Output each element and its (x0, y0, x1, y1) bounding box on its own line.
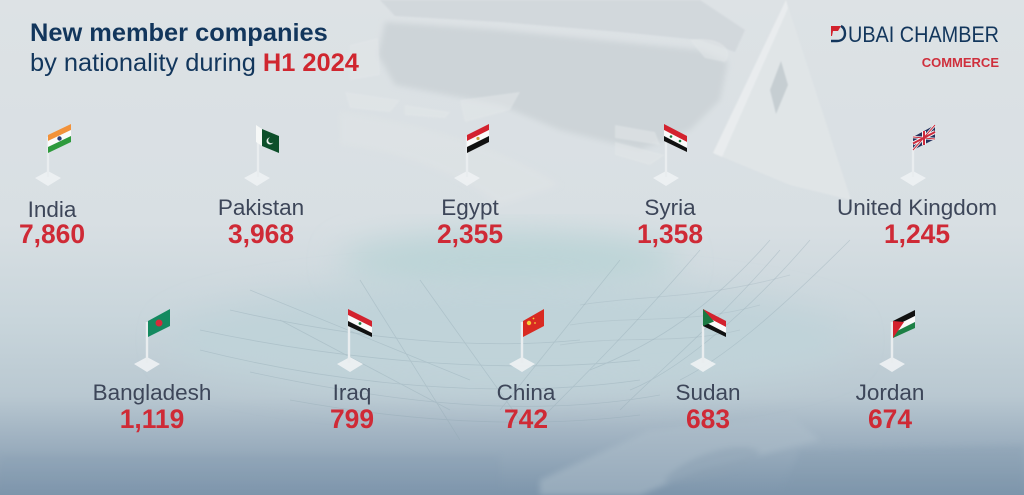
value: Egypt: 2,355 (437, 219, 503, 249)
label: Bangladesh: Bangladesh (93, 380, 211, 405)
icon: Pakistan flag (244, 125, 279, 186)
icon: Iraq flag (337, 309, 372, 372)
icon: India flag (35, 124, 71, 186)
icon: China flag (509, 309, 544, 372)
title: by nationality during (30, 49, 263, 77)
title: H1 2024 (263, 49, 359, 77)
label: Iraq: Iraq (333, 380, 371, 405)
value: Pakistan: 3,968 (228, 219, 294, 249)
title: New member companies (30, 19, 328, 47)
value: Jordan: 674 (868, 404, 912, 434)
icon: Sudan flag (690, 309, 726, 372)
Iraq: flag and figures (330, 309, 374, 434)
icon: Egypt flag (454, 124, 489, 186)
icon: United Kingdom flag (900, 125, 935, 186)
value: Iraq: 799 (330, 404, 374, 434)
tower (713, 0, 851, 200)
China: flag and figures (497, 309, 556, 434)
logo: Dubai Chamber Commerce (831, 22, 999, 70)
decorative lattice (200, 240, 850, 440)
label: Jordan: Jordan (856, 380, 924, 405)
value: Bangladesh: 1,119 (120, 404, 184, 434)
label: China: China (497, 380, 556, 405)
Syria: flag and figures (637, 124, 703, 249)
icon: Jordan flag (879, 310, 915, 372)
logo: Dubai Chamber Commerce: COMMERCE (922, 55, 999, 70)
Sudan: flag and figures (675, 309, 741, 434)
Pakistan: flag and figures (218, 125, 304, 249)
United Kingdom: flag and figures (837, 125, 997, 249)
label: Pakistan: Pakistan (218, 195, 304, 220)
logo: Dubai Chamber Commerce: UBAI CHAMBER (848, 22, 999, 47)
Jordan: flag and figures (856, 310, 924, 434)
value: India: 7,860 (19, 219, 85, 249)
value: China: 742 (504, 404, 548, 434)
lower structure (0, 415, 1024, 495)
value: United Kingdom: 1,245 (884, 219, 950, 249)
label: India: India (28, 197, 77, 222)
label: Syria: Syria (644, 195, 696, 220)
icon: Bangladesh flag (134, 309, 170, 372)
Egypt: flag and figures (437, 124, 503, 249)
India: flag and figures (19, 124, 85, 249)
label: Egypt: Egypt (441, 195, 500, 220)
label: United Kingdom: United Kingdom (837, 195, 997, 220)
label: Sudan: Sudan (675, 380, 741, 405)
Bangladesh: flag and figures (93, 309, 211, 434)
value: Sudan: 683 (686, 404, 730, 434)
icon: Syria flag (653, 124, 687, 186)
value: Syria: 1,358 (637, 219, 703, 249)
